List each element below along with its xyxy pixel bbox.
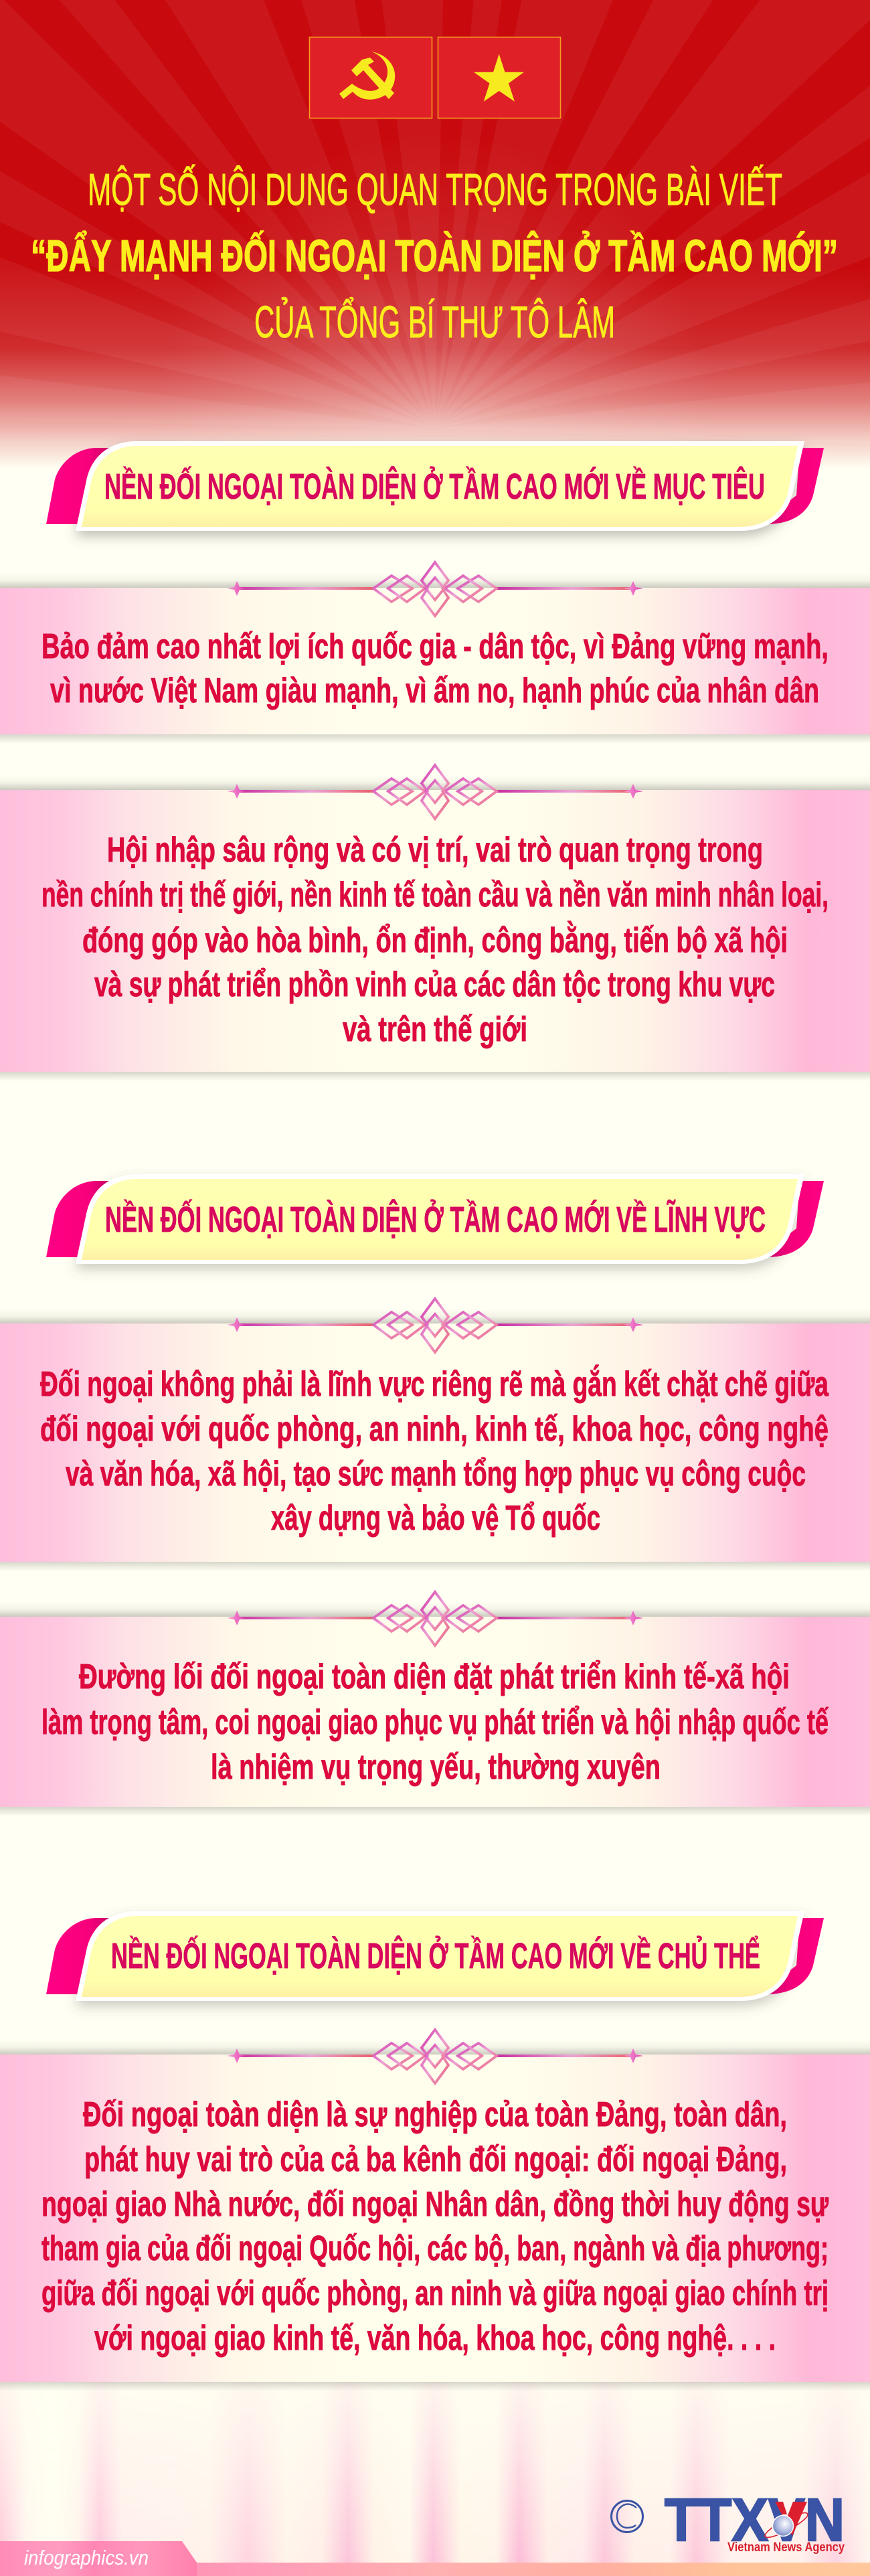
title: [31, 164, 838, 347]
heading banner: mục tiêu: [46, 441, 824, 536]
panel: actors: [0, 2030, 870, 2391]
source tab: infographics.vn: infographics.vn: [24, 2546, 149, 2569]
heading banner: chủ thể: [46, 1911, 824, 2006]
logo: TTXVN Vietnam News Agency: TTXVN: [665, 2487, 845, 2554]
bottom strip: [0, 2563, 870, 2576]
panel: field 1: [0, 1299, 870, 1571]
panel: field 2: là nhiệm vụ trọng yếu, thường xuyên: [211, 1748, 661, 1787]
panel: objective 1: [0, 562, 870, 744]
red sunburst header background: [0, 0, 870, 505]
panel: field 2: [0, 1592, 870, 1816]
curtain background at the bottom: [0, 2377, 870, 2564]
icon: party flag with hammer and sickle: [309, 37, 432, 118]
panel: objective 2: và trên thế giới: [343, 1010, 527, 1049]
heading banner: lĩnh vực: [46, 1174, 824, 1269]
icon: national flag with star: [438, 37, 561, 118]
source tab: infographics.vn: [0, 2541, 197, 2576]
panel: field 1: xây dựng và bảo vệ Tổ quốc: [271, 1499, 600, 1538]
logo: TTXVN Vietnam News Agency: Vietnam News Agency: [727, 2541, 845, 2555]
title: CỦA TỔNG BÍ THƯ TÔ LÂM: [254, 297, 615, 347]
icon: copyright symbol: [612, 2501, 642, 2532]
panel: objective 2: [0, 765, 870, 1081]
